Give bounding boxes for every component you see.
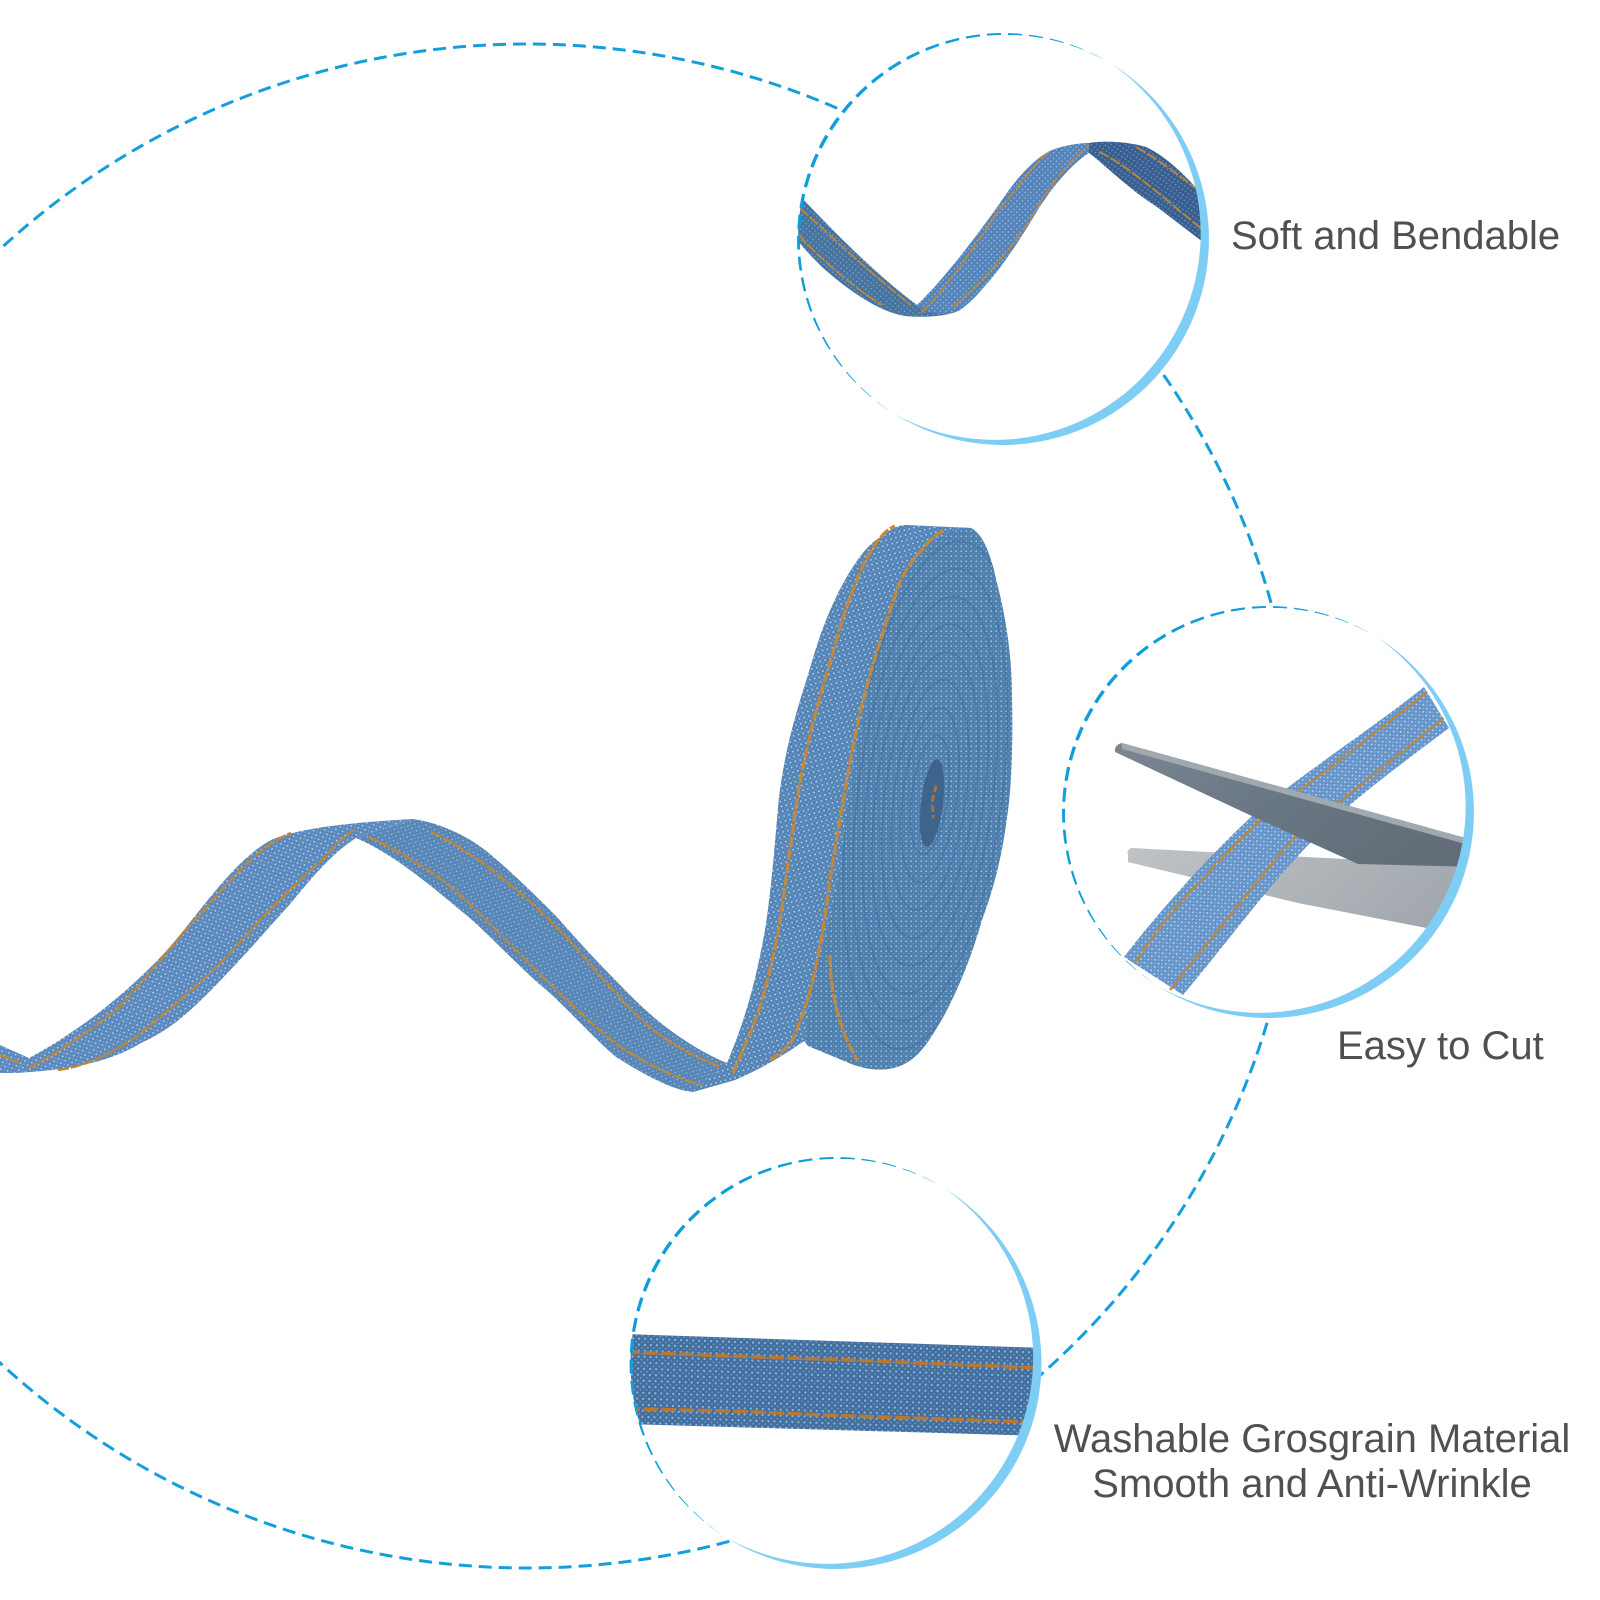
ribbon tail at left edge (0, 1045, 29, 1073)
inset ring (799, 35, 1209, 445)
label: washable grosgrain material (1054, 1417, 1570, 1506)
bending ribbon photo (790, 142, 1220, 317)
roll outer band (693, 525, 971, 1092)
rising ribbon section (15, 819, 412, 1073)
label: washable grosgrain material: Washable Grosgrain Material (1054, 1417, 1570, 1461)
inset ring (632, 1159, 1041, 1569)
inset: washable grosgrain (625, 1157, 1045, 1569)
close-up ribbon photo (625, 1334, 1045, 1436)
large dashed connector circle (0, 44, 1299, 1568)
label: washable grosgrain material: Smooth and Anti-Wrinkle (1092, 1462, 1532, 1506)
roll side face with concentric layers (804, 525, 1012, 1070)
label: easy to cut: Easy to Cut (1337, 1024, 1544, 1068)
roll center hole (916, 758, 948, 848)
main ribbon roll (0, 525, 1044, 1092)
falling ribbon section (356, 819, 735, 1092)
inset: easy to cut (1062, 606, 1480, 1018)
label: soft and bendable: Soft and Bendable (1231, 214, 1560, 258)
inset: soft and bendable (790, 33, 1220, 445)
scissors cutting ribbon photo (1115, 687, 1480, 995)
inset ring (1064, 608, 1474, 1018)
